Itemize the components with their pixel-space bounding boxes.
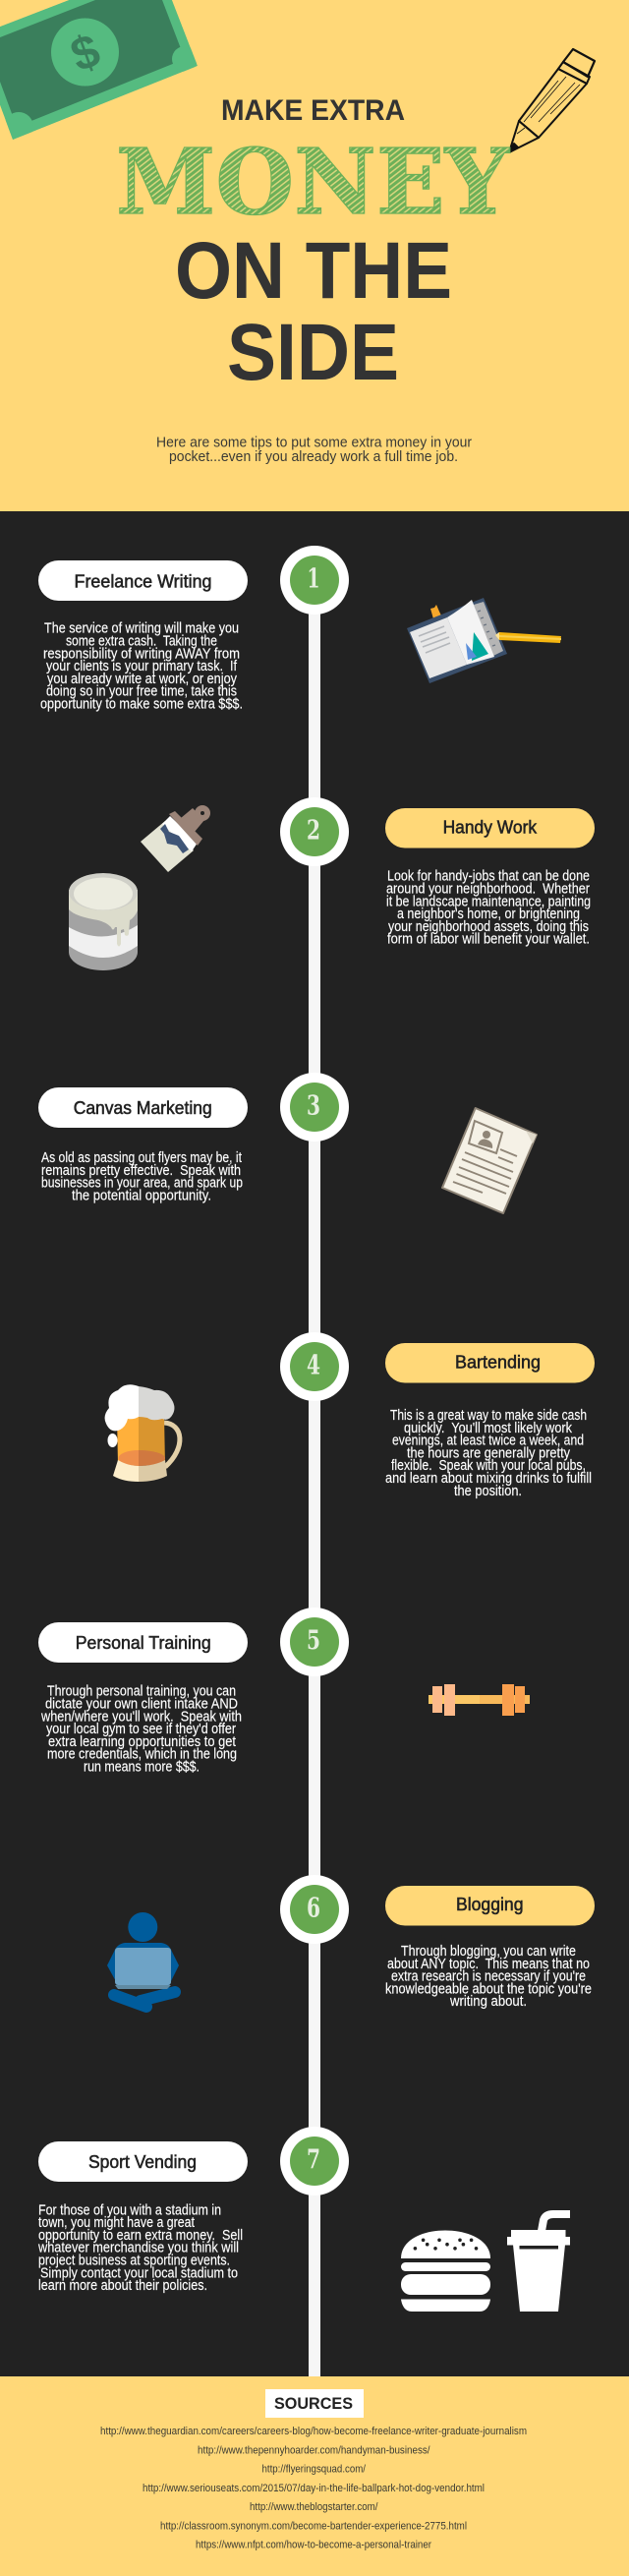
number badge 4 <box>280 1332 349 1401</box>
panel: timeline <box>0 511 629 2376</box>
text: bartending: quickly. You'll most likely work <box>404 1421 573 1436</box>
text: bartending: evenings, at least twice a week, and <box>392 1434 584 1449</box>
text: personal training: your local gym to see if they'd offer <box>46 1722 236 1737</box>
text: bartending: This is a great way to make side cash <box>390 1408 587 1424</box>
number badge 5 <box>280 1608 349 1676</box>
icon: paint can <box>69 873 138 970</box>
text: blogging: writing about. <box>449 1994 527 2010</box>
source links: http://www.theguardian.com/careers/careers-blog/how-become-freelance-writer-graduate-journalism <box>100 2426 527 2437</box>
pill heading: canvas marketing <box>38 1087 248 1128</box>
text: blogging: extra research is necessary if you're <box>391 1969 586 1985</box>
pill heading: handy work <box>385 808 595 848</box>
number badge 6: 6 <box>307 1894 320 1923</box>
pill heading: freelance writing: Freelance Writing <box>75 570 212 592</box>
text: blogging: Through blogging, you can write <box>401 1944 576 1960</box>
pill heading: canvas marketing: Canvas Marketing <box>74 1097 212 1118</box>
text: freelance writing: The service of writing will make you <box>44 621 239 637</box>
text: personal training: more credentials, which in the long <box>47 1747 237 1763</box>
text: handy work: a neighbor's home, or brightening <box>397 907 580 922</box>
icon: dumbbell <box>429 1684 530 1716</box>
number badge 2: 2 <box>307 816 320 846</box>
source links: https://www.nfpt.com/how-to-become-a-personal-trainer <box>196 2539 431 2550</box>
pill heading: bartending <box>385 1343 595 1382</box>
text: freelance writing: you already write at work, or enjoy <box>47 672 238 687</box>
text: handy work: Look for handy-jobs that can be done <box>387 869 590 885</box>
number badge 7 <box>280 2127 349 2195</box>
pill heading: sport vending <box>38 2141 248 2182</box>
number badge 5: 5 <box>307 1626 320 1656</box>
text: handy work <box>386 869 591 948</box>
text: sport vending: project business at sporting events. <box>38 2254 230 2269</box>
source links: http://www.thepennyhoarder.com/handyman-business/ <box>198 2444 430 2456</box>
text: handy work: around your neighborhood. Whether <box>386 881 590 897</box>
number badge 2 <box>280 797 349 866</box>
icon: paint brush <box>141 805 210 872</box>
icon: person with laptop <box>107 1912 179 2007</box>
text: bartending: the position. <box>454 1484 522 1499</box>
text: canvas marketing: the potential opportunity. <box>72 1188 211 1203</box>
text: bartending: and learn about mixing drinks to fulfill <box>385 1471 592 1487</box>
icon: drink cup <box>507 2214 570 2312</box>
pill heading: blogging: Blogging <box>456 1894 523 1914</box>
step 6: blogging <box>107 1875 595 2010</box>
sources heading <box>265 2389 364 2418</box>
intro text: pocket...even if you already work a full time job. <box>169 449 458 465</box>
text: sport vending: opportunity to earn extra money. Sell <box>38 2228 243 2244</box>
source links: http://www.seriouseats.com/2015/07/day-in-the-life-ballpark-hot-dog-vendor.html <box>143 2483 485 2494</box>
text: blogging: about ANY topic. This means that no <box>387 1957 590 1972</box>
text: handy work: your neighborhood assets, doing this <box>388 919 589 935</box>
text: freelance writing: opportunity to make some extra $$$. <box>40 696 243 712</box>
icon: beer mug <box>105 1384 180 1482</box>
pill heading: freelance writing <box>38 560 248 601</box>
title: money: MONEY <box>116 129 510 235</box>
text: freelance writing: doing so in your free time, take this <box>46 684 237 700</box>
icon: dollar bill: $ <box>64 25 107 83</box>
pill heading: blogging <box>385 1886 595 1925</box>
number badge 6 <box>280 1875 349 1944</box>
source links <box>100 2426 527 2550</box>
panel: sources <box>0 2376 629 2576</box>
text: sport vending <box>37 2202 243 2294</box>
source links: http://classroom.synonym.com/become-bartender-experience-2775.html <box>160 2520 467 2532</box>
text: freelance writing <box>40 621 243 712</box>
intro text: Here are some tips to put some extra money in your <box>156 435 472 450</box>
text: handy work: form of labor will benefit your wallet. <box>387 932 590 948</box>
text: canvas marketing <box>41 1150 243 1203</box>
intro text <box>156 435 472 465</box>
text: sport vending: For those of you with a stadium in <box>38 2202 221 2218</box>
step 7: sport vending <box>37 2127 570 2312</box>
step 3: canvas marketing <box>38 1073 537 1213</box>
number badge 4: 4 <box>307 1351 320 1380</box>
source links: http://flyeringsquad.com/ <box>261 2464 367 2476</box>
panel: header <box>0 0 596 464</box>
pill heading: handy work: Handy Work <box>443 816 538 838</box>
icon: resume document <box>442 1108 537 1213</box>
text: sport vending: learn more about their policies. <box>38 2278 207 2294</box>
step 4: bartending <box>105 1332 595 1499</box>
pill heading: sport vending: Sport Vending <box>88 2151 197 2172</box>
step 5: personal training <box>38 1608 530 1776</box>
number badge 3: 3 <box>307 1091 320 1121</box>
pill heading: personal training: Personal Training <box>76 1632 211 1653</box>
title: make extra: MAKE EXTRA <box>221 94 405 127</box>
text: personal training: dictate your own client intake AND <box>45 1697 238 1713</box>
text: personal training: extra learning opportunities to get <box>48 1734 236 1750</box>
text: freelance writing: your clients is your primary task. If <box>46 659 238 674</box>
pill heading: personal training <box>38 1622 248 1663</box>
text: personal training <box>40 1684 242 1776</box>
step 2: handy work <box>69 797 595 970</box>
text: freelance writing: some extra cash. Taking the <box>66 633 217 649</box>
text: bartending: the hours are generally pretty <box>407 1445 571 1461</box>
title: side: SIDE <box>227 308 399 397</box>
text: sport vending: town, you might have a great <box>38 2215 195 2231</box>
number badge 7: 7 <box>307 2145 320 2175</box>
text: bartending: flexible. Speak with your local pubs, <box>391 1458 586 1474</box>
text: handy work: it be landscape maintenance, painting <box>386 894 591 909</box>
icon: notebook and pencil <box>407 598 561 683</box>
icon: dollar bill <box>0 0 198 142</box>
number badge 1 <box>280 546 349 615</box>
icon: pencil <box>509 49 595 152</box>
sources heading: SOURCES <box>274 2394 353 2413</box>
text: personal training: Through personal training, you can <box>47 1684 236 1700</box>
source links: http://www.theblogstarter.com/ <box>250 2501 378 2513</box>
number badge 1: 1 <box>307 564 320 594</box>
text: canvas marketing: remains pretty effective. Speak with <box>41 1163 241 1179</box>
text: personal training: when/where you'll work. Speak with <box>40 1709 242 1725</box>
text: blogging: knowledgeable about the topic you're <box>385 1981 592 1997</box>
text: sport vending: Simply contact your local stadium to <box>40 2265 238 2281</box>
text: freelance writing: responsibility of writing AWAY from <box>43 646 240 662</box>
title: on the: ON THE <box>175 226 452 316</box>
text: blogging <box>385 1944 592 2010</box>
text: personal training: run means more $$$. <box>84 1760 200 1776</box>
step 1: freelance writing <box>38 546 561 712</box>
text: canvas marketing: businesses in your area, and spark up <box>41 1176 243 1192</box>
timeline line <box>309 580 320 2376</box>
number badge 3 <box>280 1073 349 1142</box>
pill heading: bartending: Bartending <box>455 1351 541 1373</box>
text: canvas marketing: As old as passing out flyers may be, it <box>41 1150 242 1166</box>
text: bartending <box>385 1408 592 1499</box>
text: sport vending: whatever merchandise you think will <box>37 2241 239 2256</box>
icon: burger <box>401 2230 490 2312</box>
